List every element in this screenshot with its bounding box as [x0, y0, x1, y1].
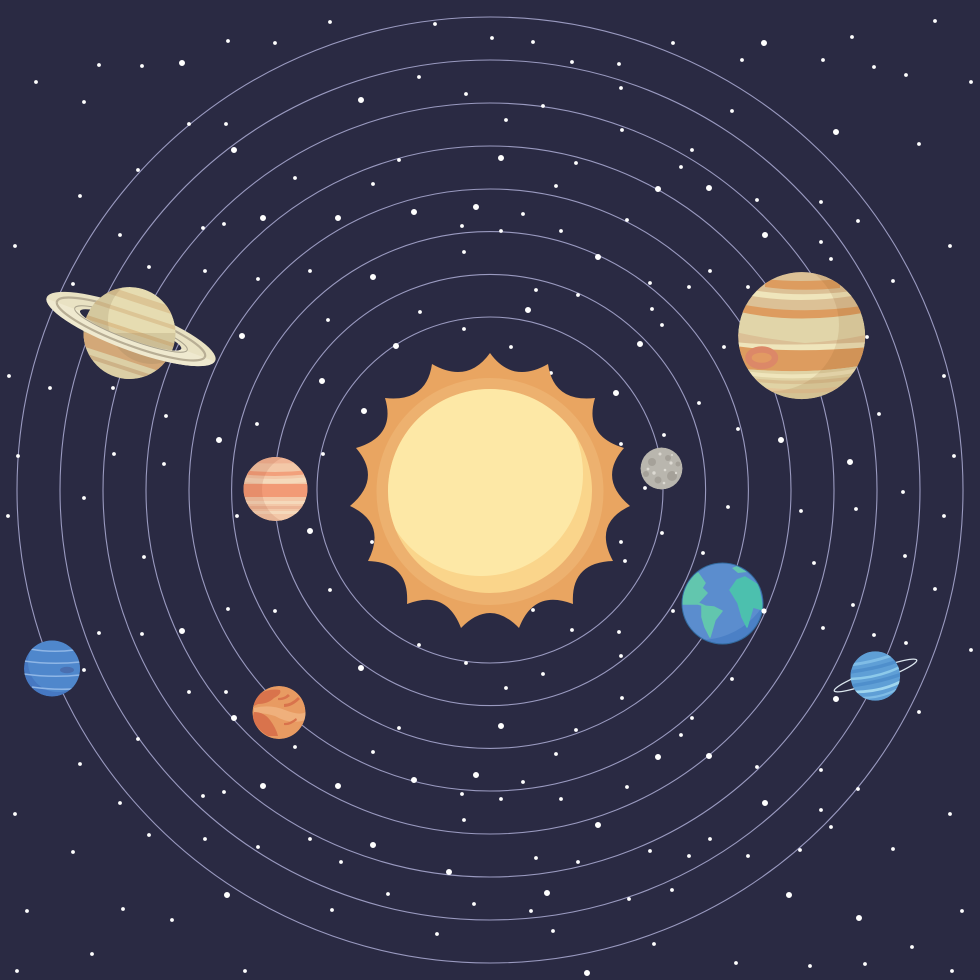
uranus: stripes — [850, 653, 902, 698]
jupiter: cream stripe — [752, 290, 852, 300]
jupiter: great red spot — [745, 346, 778, 369]
jupiter: top orange band — [765, 279, 840, 290]
venus: base — [244, 457, 308, 521]
uranus: base — [850, 651, 900, 701]
sun: bright core — [388, 389, 583, 576]
saturn: ring front — [46, 298, 215, 366]
earth: south america — [702, 606, 722, 637]
jupiter: great orange band — [735, 346, 870, 371]
planet: mars — [252, 686, 306, 739]
earth: outline — [682, 562, 764, 644]
planet: earth — [682, 562, 764, 644]
saturn: ring back — [39, 278, 223, 380]
mars: light streaks — [254, 706, 306, 722]
planet: venus — [244, 457, 308, 521]
neptune: lit side — [28, 640, 80, 692]
uranus: ring back — [832, 654, 919, 697]
jupiter: base — [738, 272, 865, 399]
jupiter: upper orange band — [742, 305, 862, 318]
mars: base — [252, 686, 306, 739]
planet: mercury — [640, 448, 682, 490]
planet: saturn — [46, 287, 216, 379]
jupiter: lower cream stripes — [750, 368, 856, 378]
earth: ocean — [682, 564, 762, 640]
mercury: highlights — [647, 452, 677, 484]
mars: dark patches — [252, 690, 300, 736]
earth: arctic land — [732, 566, 747, 573]
planet: jupiter — [738, 272, 866, 400]
sun: mid disc — [388, 389, 592, 593]
jupiter: lower zones — [748, 366, 858, 400]
venus: bands — [244, 457, 308, 514]
jupiter: upper tan zone — [743, 272, 860, 312]
sun: outer glow ring — [376, 378, 604, 605]
earth: north america — [680, 573, 707, 606]
planet: uranus — [832, 651, 919, 701]
sun: spiked corona — [350, 353, 630, 628]
neptune: base — [24, 640, 80, 696]
saturn: globe — [84, 287, 176, 379]
venus: shadow crescent — [244, 457, 282, 521]
jupiter: tan ripple — [735, 332, 870, 346]
neptune: stripes — [24, 649, 80, 689]
jupiter: cream ripple — [735, 342, 870, 350]
jupiter: shadow crescent — [772, 274, 865, 399]
neptune: dark spot — [60, 667, 74, 673]
mercury: craters — [643, 455, 680, 484]
earth: ocean shadow — [706, 610, 762, 644]
mercury: base — [640, 448, 682, 490]
star over earth edge — [761, 608, 767, 614]
sun — [350, 353, 630, 628]
earth: eurasia africa — [730, 577, 763, 627]
planet: neptune — [24, 640, 80, 696]
